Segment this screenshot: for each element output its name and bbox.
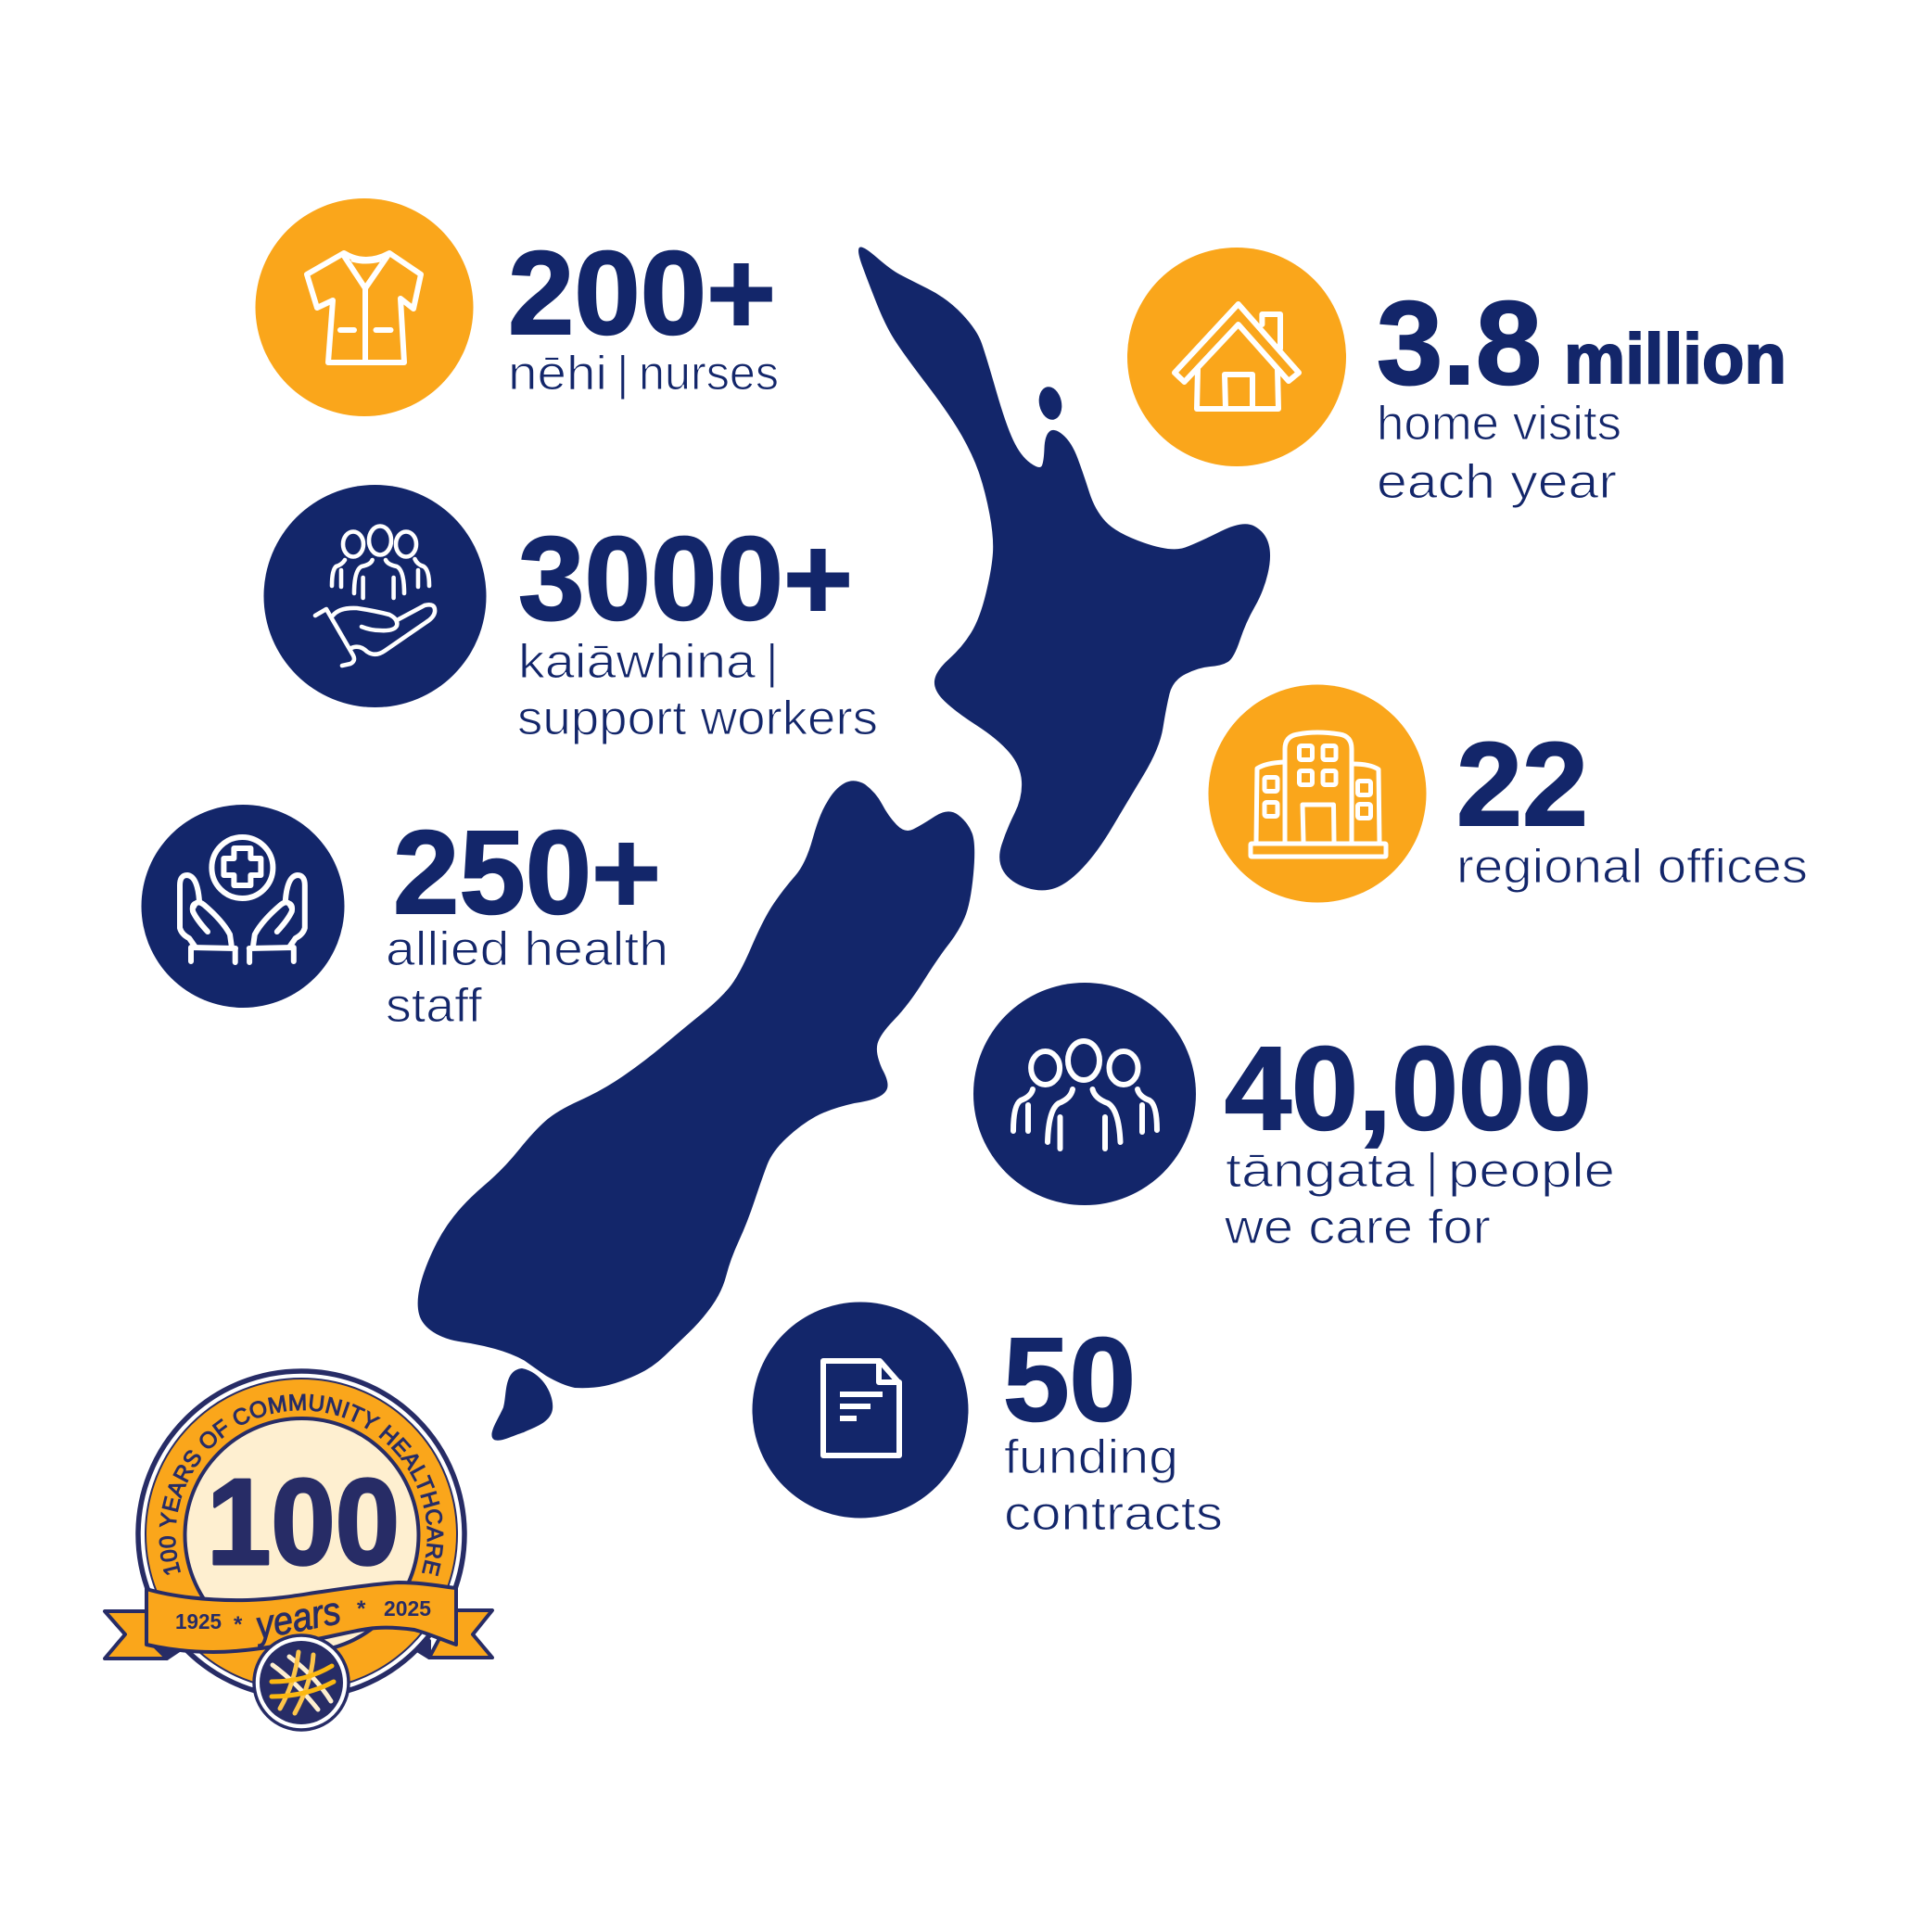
stat: support workers	[263, 485, 878, 745]
label people we care for: tāngata	[1226, 1144, 1415, 1198]
label allied health staff: staff	[386, 979, 483, 1033]
label nurses: nēhi	[508, 347, 607, 400]
figure 200+: 200+	[508, 227, 776, 360]
label home visits each year	[1377, 397, 1621, 509]
label support workers: |	[766, 635, 779, 689]
label people we care for: we care for	[1224, 1201, 1491, 1254]
medallion with woven logo	[254, 1635, 349, 1730]
circle with hands and cross icon	[141, 805, 345, 1008]
label funding contracts: contracts	[1004, 1487, 1223, 1541]
stat: home visits	[1127, 248, 1786, 509]
label allied health staff	[386, 922, 668, 1033]
stat: nurses	[256, 198, 779, 416]
figure 22: 22	[1456, 718, 1588, 851]
label funding contracts: funding	[1004, 1430, 1178, 1484]
figure 250+: 250+	[393, 807, 661, 939]
label allied health staff: allied health	[386, 922, 668, 976]
circle with building icon	[1209, 684, 1426, 903]
label support workers: support workers	[517, 692, 878, 745]
label people we care for	[1224, 1144, 1615, 1254]
label nurses: nurses	[639, 347, 779, 400]
ribbon banner	[146, 1582, 456, 1652]
label nurses: |	[616, 347, 629, 400]
ribbon star left: *	[234, 1612, 243, 1637]
stat: allied health	[141, 805, 668, 1033]
figure 50: 50	[1003, 1314, 1136, 1446]
stat: funding contracts	[753, 1302, 1223, 1541]
circle with house icon	[1127, 248, 1346, 466]
figure 40,000: 40,000	[1225, 1023, 1592, 1155]
stat: people we care for	[973, 983, 1615, 1254]
badge number 100: 100	[207, 1454, 400, 1590]
badge rings	[138, 1371, 464, 1697]
curved badge text: 100 YEARS OF COMMUNITY HEALTHCARE	[159, 1394, 443, 1576]
ribbon star right: *	[357, 1596, 366, 1621]
North Island	[858, 247, 1270, 890]
label support workers: kaiāwhina	[518, 635, 756, 689]
badge: 100 years of community healthcare	[102, 1368, 495, 1732]
label home visits each year: home visits	[1377, 397, 1621, 451]
label home visits each year: each year	[1377, 455, 1617, 509]
ribbon word years: years	[249, 1588, 344, 1647]
stat: regional offices	[1209, 684, 1808, 903]
circle with people icon	[973, 983, 1196, 1205]
figure 3.8 million: million	[1564, 320, 1786, 399]
figure 3000+: 3000+	[518, 513, 853, 645]
ribbon year 2025: 2025	[384, 1596, 431, 1621]
circle with document icon	[753, 1302, 968, 1519]
Great Barrier Island	[1036, 385, 1064, 422]
label support workers	[517, 635, 878, 745]
label people we care for: people	[1448, 1144, 1615, 1198]
label nurses	[508, 347, 779, 400]
figure 3.8 million: 3.8	[1377, 277, 1542, 410]
label funding contracts	[1004, 1430, 1223, 1541]
South Island	[418, 781, 974, 1388]
circle with uniform icon	[256, 198, 473, 416]
figure 3.8 million	[1377, 277, 1786, 410]
label people we care for: |	[1426, 1144, 1439, 1198]
ribbon tails	[105, 1610, 492, 1659]
Stewart Island	[491, 1368, 553, 1441]
ribbon year 1925: 1925	[175, 1609, 222, 1633]
circle with hand and people icon	[263, 485, 486, 707]
map of New Zealand	[418, 247, 1270, 1441]
label regional offices: regional offices	[1456, 840, 1808, 894]
